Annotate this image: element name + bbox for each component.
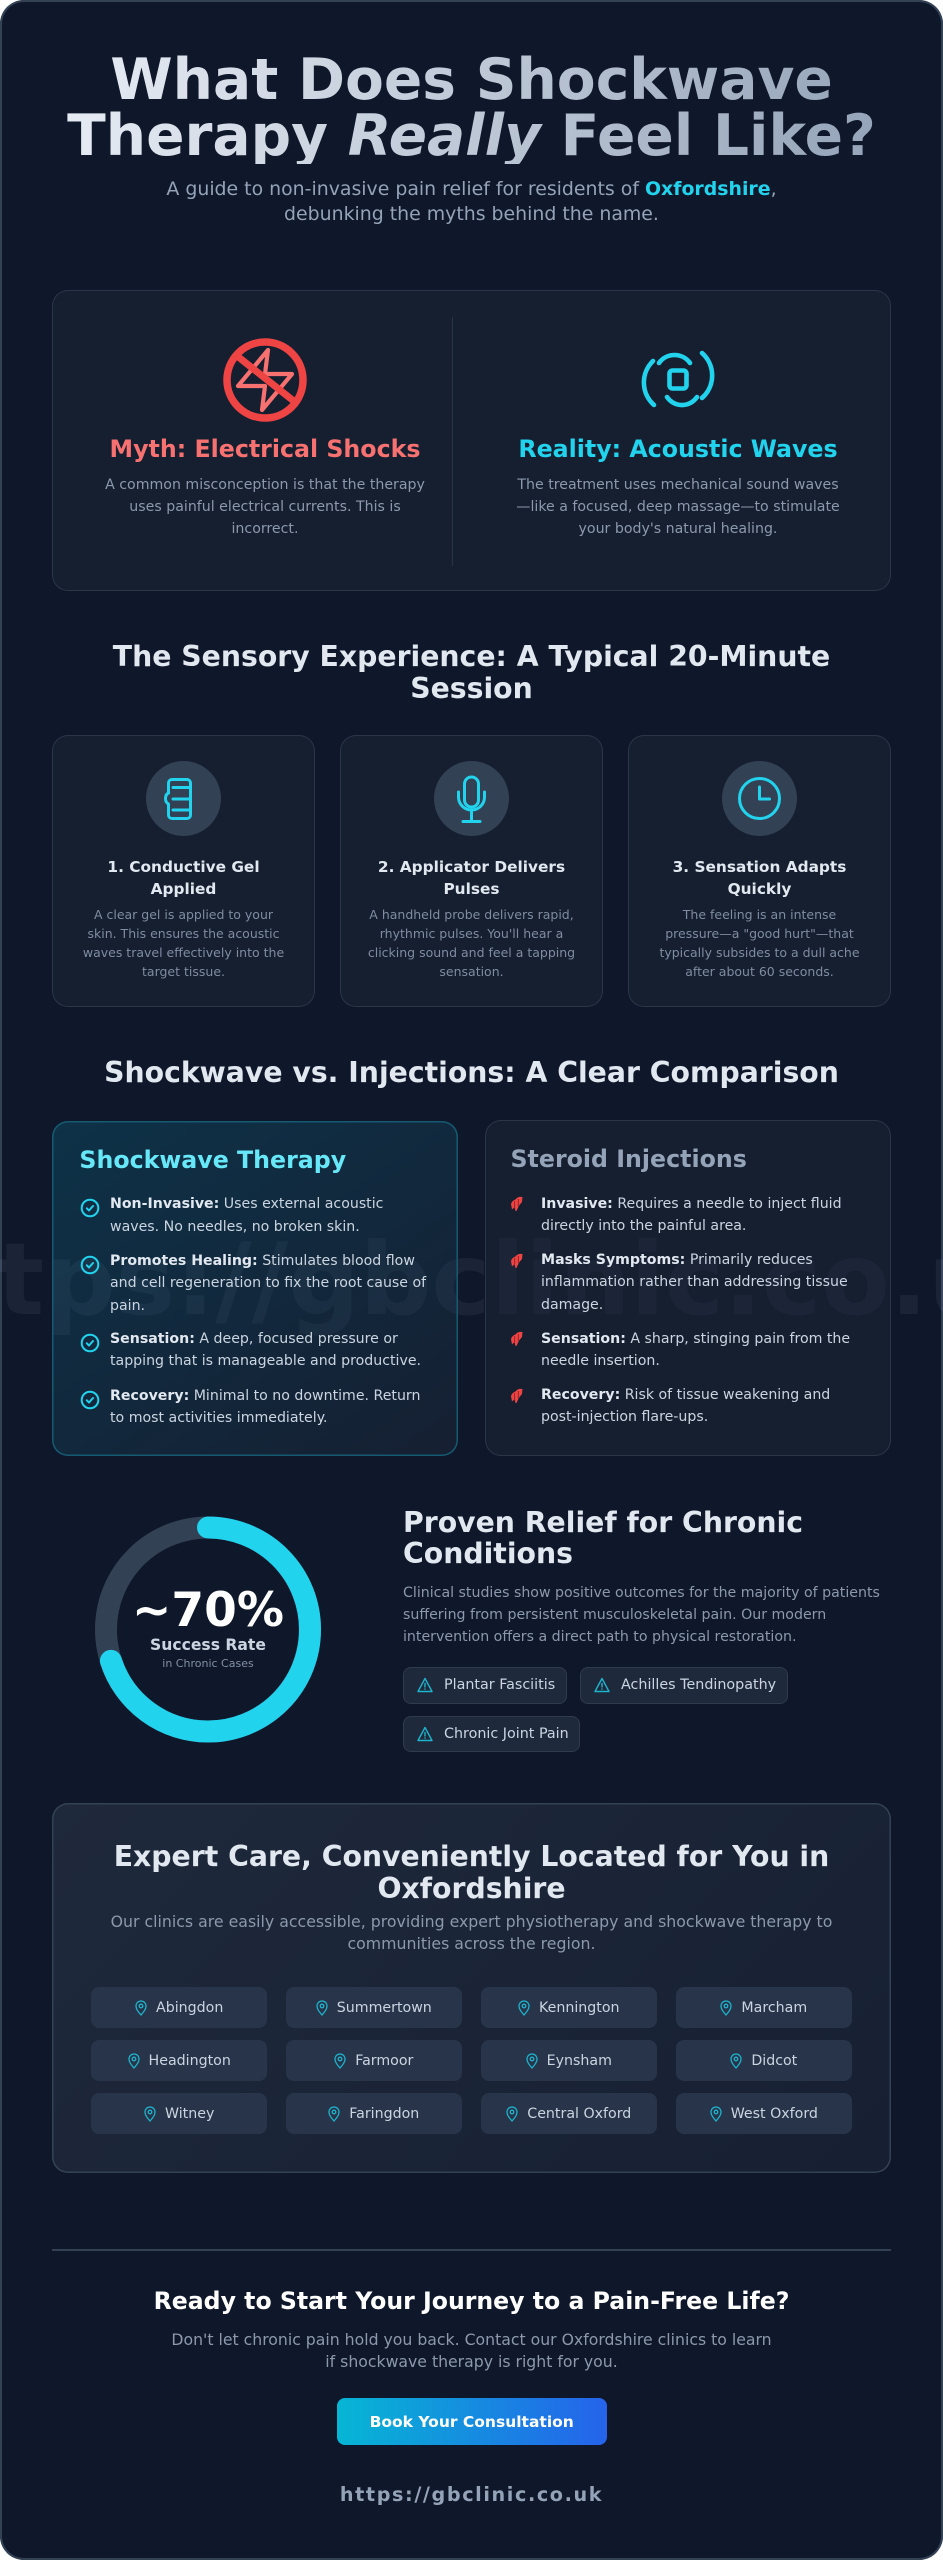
text: tapping that is manageable and productive. [110,1353,421,1369]
location: Didcot: Didcot [751,2053,797,2069]
description: Our clinics are easily accessible, providing expert physiotherapy and shockwave therapy to [111,1912,832,1930]
icon: gel [146,761,221,836]
text [541,1331,850,1369]
text: to most activities immediately. [110,1410,328,1426]
description: suffering from persistent musculoskeletal pain. Our modern [403,1607,826,1623]
heading: Ready to Start Your Journey to a Pain-Free Life? [154,2287,789,2315]
icon: alert triangle [416,1726,432,1742]
text: reality description: —like a focused, deep massage—to stimulate [516,499,840,515]
step description: rhythmic pulses. You'll hear a [380,926,563,941]
step description: A clear gel is applied to your [94,907,273,922]
panel: shockwave therapy [52,1121,458,1456]
text: inflammation rather than addressing tissue [541,1274,848,1290]
icon: warning mark [511,1196,522,1211]
location: Headington: Headington [149,2053,231,2069]
text: myth description: uses painful electrical currents. This is [129,499,401,515]
text: myth description: A common misconception is that the therapy [105,477,425,493]
text [110,1253,426,1314]
description: Don't let chronic pain hold you back. Contact our Oxfordshire clinics to learn [171,2330,772,2349]
step title: Pulses [443,880,500,898]
text: Non-Invasive: Uses external acoustic [110,1196,383,1212]
icon: warning mark [511,1332,522,1346]
icon: check [80,1198,100,1218]
title: What Does Shockwave [110,47,833,113]
location: Farmoor: Farmoor [355,2053,413,2069]
step title: Applied [151,880,216,898]
chip: chronic joint pain [403,1716,580,1752]
divider line [452,317,453,566]
heading: Conditions [403,1537,573,1570]
step title [673,858,846,898]
location: Kennington: Kennington [539,2000,620,2016]
text: reality description [516,477,840,537]
panel: step 2 [340,735,603,1007]
description [52,1910,891,1954]
text: and cell regeneration to fix the root cause of [110,1275,426,1291]
list item: sensation [80,1331,421,1369]
section: proven relief [403,1506,880,1752]
step description: skin. This ensures the acoustic [87,926,280,941]
text [110,1331,421,1369]
subtitle: debunking the myths behind the name. [284,203,659,225]
description: if shockwave therapy is right for you. [325,2352,618,2371]
text [541,1387,830,1425]
text: waves. No needles, no broken skin. [110,1219,360,1235]
icon: acoustic waves [642,350,714,408]
icon: microphone [434,761,509,836]
text: Recovery: Minimal to no downtime. Return [110,1388,420,1404]
list item: masks symptoms [511,1252,848,1313]
panel: step 3 [628,735,891,1007]
text: Plantar Fasciitis [444,1677,555,1693]
location: Witney: Witney [165,2106,214,2122]
location: Abingdon [91,1987,267,2028]
subtitle [166,178,777,225]
step title: 3. Sensation Adapts [673,858,846,876]
location: West Oxford [676,2093,852,2134]
icon: alert triangle [416,1677,432,1693]
icon: check [80,1256,100,1274]
text: Invasive: Requires a needle to inject fluid [541,1196,842,1212]
heading: Expert Care, Conveniently Located for You in [114,1840,829,1873]
location: Witney [91,2093,267,2134]
location: Faringdon [286,2093,462,2134]
location: Kennington [481,1987,657,2028]
text: needle insertion. [541,1353,660,1369]
panel: steroid injections [485,1120,891,1456]
button: Book Your Consultation [370,2413,574,2431]
step description: clicking sound and feel a tapping [368,945,575,960]
subtitle: A guide to non-invasive pain relief for residents of Oxfordshire, [166,178,777,200]
icon: check [80,1390,100,1410]
website url: https://gbclinic.co.uk [340,2483,603,2506]
icon: warning mark [511,1388,522,1403]
text: Sensation: A deep, focused pressure or [110,1331,398,1347]
panel: locations [52,1803,891,2173]
text [110,1196,383,1235]
sublabel: in Chronic Cases [162,1657,254,1670]
heading: Shockwave Therapy [79,1146,346,1174]
heading [52,1841,891,1905]
donut chart: success rate [95,1516,321,1742]
list item: promotes healing [80,1253,426,1314]
heading: Proven Relief for Chronic [403,1506,803,1539]
text: reality description: The treatment uses mechanical sound waves [517,477,839,493]
list item: recovery [511,1387,830,1425]
value: ~70% [132,1583,284,1638]
text: damage. [541,1297,603,1313]
icon: clock [722,761,797,836]
button [337,2398,607,2445]
description [403,1582,880,1648]
icon: crossed-out lightning bolt [223,338,307,422]
step title [378,858,565,898]
location: Headington [91,2040,267,2081]
label: Success Rate [150,1636,266,1654]
title: Therapy Really Feel Like? [67,103,876,169]
footer call to action [52,2249,891,2519]
description: intervention offers a direct path to physical restoration. [403,1629,796,1645]
step description [659,907,860,979]
text: myth description [105,477,425,537]
heading: myth: Myth: Electrical Shocks [110,435,420,463]
panel: step 1 [52,735,315,1007]
location: Marcham: Marcham [741,2000,807,2016]
text: Masks Symptoms: Primarily reduces [541,1252,813,1268]
location: Eynsham: Eynsham [547,2053,612,2069]
step title: 1. Conductive Gel [107,858,260,876]
heading: Steroid Injections [510,1145,747,1173]
text: myth description: incorrect. [232,521,298,537]
text: Recovery: Risk of tissue weakening and [541,1387,830,1403]
heading: sensory experience: The Sensory Experience: A Typical 20-Minute [113,640,830,673]
step description: typically subsides to a dull ache [659,945,860,960]
text: Sensation: A sharp, stinging pain from the [541,1331,850,1347]
step description: target tissue. [142,964,225,979]
text: Promotes Healing: Stimulates blood flow [110,1253,415,1269]
location: Didcot [676,2040,852,2081]
icon: alert triangle [594,1677,610,1693]
panel: myth vs reality [52,290,891,591]
ring [95,1516,321,1742]
heading [403,1506,803,1570]
description: Clinical studies show positive outcomes for the majority of patients [403,1585,880,1601]
chip: plantar fasciitis [403,1667,567,1704]
step title: 2. Applicator Delivers [378,858,565,876]
heading: comparison: Shockwave vs. Injections: A Clear Comparison [104,1056,839,1089]
step description [368,907,575,979]
location: Eynsham [481,2040,657,2081]
text: pain. [110,1298,145,1314]
text: reality description: your body's natural healing. [579,521,777,537]
text [541,1196,842,1234]
location: Summertown: Summertown [337,2000,432,2016]
location: Faringdon: Faringdon [349,2106,419,2122]
step description: A handheld probe delivers rapid, [369,907,574,922]
description [52,2329,891,2373]
list item: non-invasive [80,1196,383,1235]
step description: The feeling is an intense [683,907,836,922]
step description: sensation. [439,964,504,979]
text: directly into the painful area. [541,1218,746,1234]
location: Farmoor [286,2040,462,2081]
icon: check [80,1334,100,1352]
location: Marcham [676,1987,852,2028]
list item: invasive [511,1196,842,1234]
step description: waves travel effectively into the [83,945,284,960]
heading: Oxfordshire [377,1872,566,1905]
list item: recovery [80,1388,420,1426]
list item: sensation [511,1331,850,1369]
step description: after about 60 seconds. [685,964,834,979]
heading: sensory experience: Session [410,672,533,705]
location: Central Oxford: Central Oxford [527,2106,631,2122]
step title [107,858,260,898]
location: Abingdon: Abingdon [156,2000,223,2016]
heading: sensory experience [112,640,830,705]
step description [83,907,284,979]
title [60,52,883,164]
text [541,1252,848,1313]
text: Chronic Joint Pain [444,1726,569,1742]
description: communities across the region. [348,1934,595,1952]
location: Summertown [286,1987,462,2028]
step description: pressure—a "good hurt"—that [665,926,854,941]
icon: warning mark [511,1254,522,1268]
location: West Oxford: West Oxford [731,2106,818,2122]
step title: Quickly [728,880,791,898]
chip: achilles tendinopathy [580,1667,788,1704]
text [110,1388,420,1426]
heading: reality: Reality: Acoustic Waves [518,435,838,463]
location: Central Oxford [481,2093,657,2134]
text: Achilles Tendinopathy [621,1677,776,1693]
text: post-injection flare-ups. [541,1409,708,1425]
